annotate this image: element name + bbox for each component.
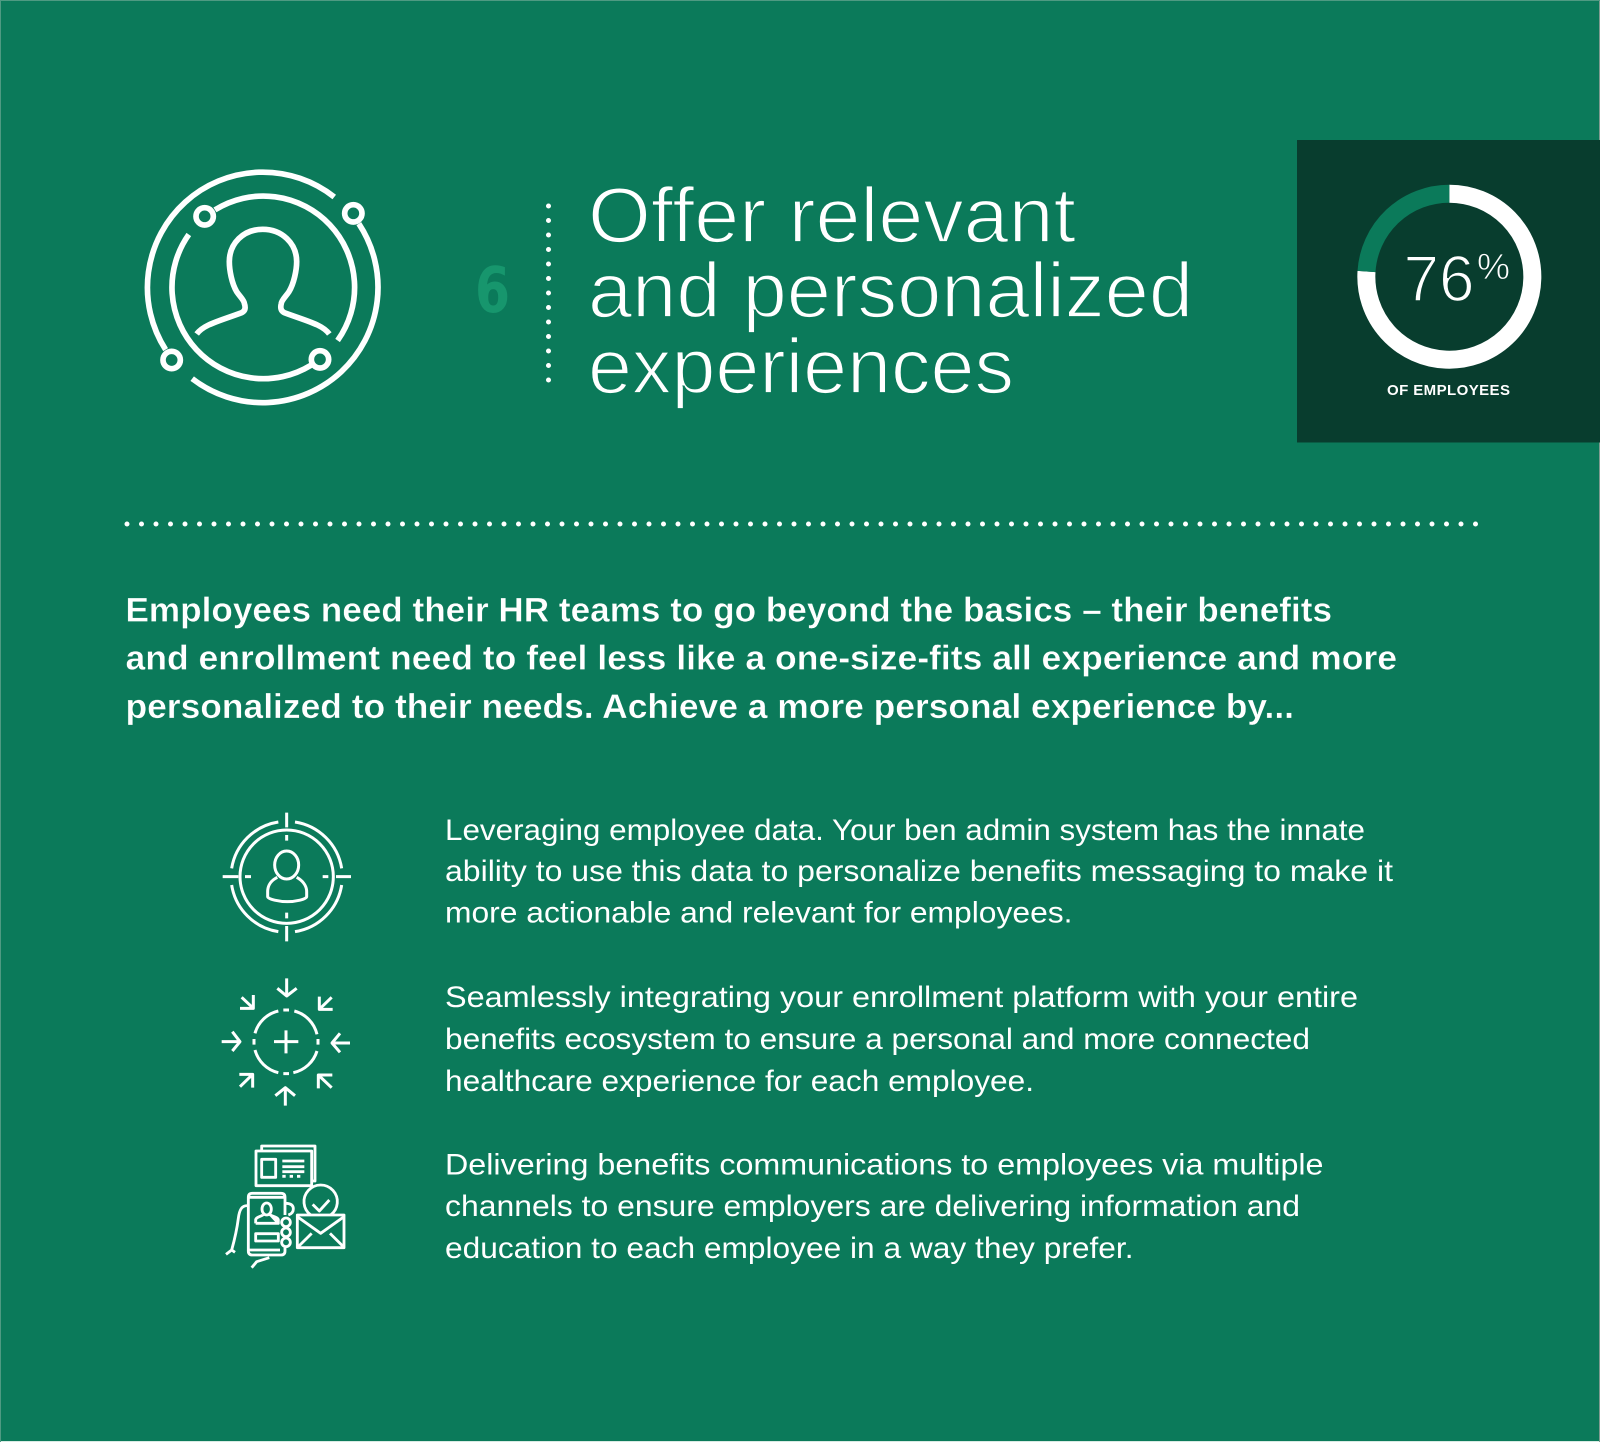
intro text: personalized to their needs. Achieve a more personal experience by... [126, 688, 1294, 726]
section number: 6 [475, 254, 510, 327]
statistic value: % [1477, 246, 1510, 287]
text: seamless integration [445, 981, 1358, 1098]
title: Offer relevant [588, 171, 1076, 259]
title [588, 171, 1193, 410]
text: multichannel delivery: Delivering benefits communications to employees via multiple [445, 1148, 1324, 1182]
icon: person in target [223, 813, 351, 941]
text: seamless integration: benefits ecosystem to ensure a personal and more connected [445, 1023, 1310, 1056]
title: and personalized [588, 246, 1193, 334]
text: multichannel delivery: education to each employee in a way they prefer. [445, 1232, 1134, 1265]
dotted divider: horizontal [127, 522, 1478, 526]
icon: person in orbit circles [147, 172, 378, 403]
text: seamless integration: Seamlessly integrating your enrollment platform with your entire [445, 981, 1358, 1014]
text: multichannel delivery: channels to ensure employers are delivering information and [445, 1190, 1300, 1223]
text: multichannel delivery [445, 1148, 1324, 1265]
text: leveraging employee data: ability to use this data to personalize benefits messaging to make it [445, 855, 1394, 888]
statistic caption: OF EMPLOYEES [1387, 382, 1510, 399]
text: leveraging employee data: more actionable and relevant for employees. [445, 896, 1072, 930]
title: experiences [588, 322, 1014, 410]
intro text: and enrollment need to feel less like a one-size-fits all experience and more [126, 640, 1397, 678]
text: seamless integration: healthcare experience for each employee. [445, 1065, 1034, 1098]
statistic value [1404, 242, 1510, 315]
text: leveraging employee data: Leveraging employee data. Your ben admin system has the innate [445, 814, 1365, 847]
icon: arrows converging on plus [222, 978, 350, 1106]
dotted divider: vertical [546, 206, 551, 381]
donut chart: 76 percent [1366, 194, 1532, 360]
statistic value: 76 [1404, 242, 1474, 315]
panel: statistic [1297, 140, 1600, 442]
intro text: Employees need their HR teams to go beyond the basics – their benefits [126, 592, 1332, 630]
text: leveraging employee data [445, 814, 1394, 930]
icon: multichannel communications [226, 1146, 344, 1268]
intro text [126, 592, 1397, 726]
